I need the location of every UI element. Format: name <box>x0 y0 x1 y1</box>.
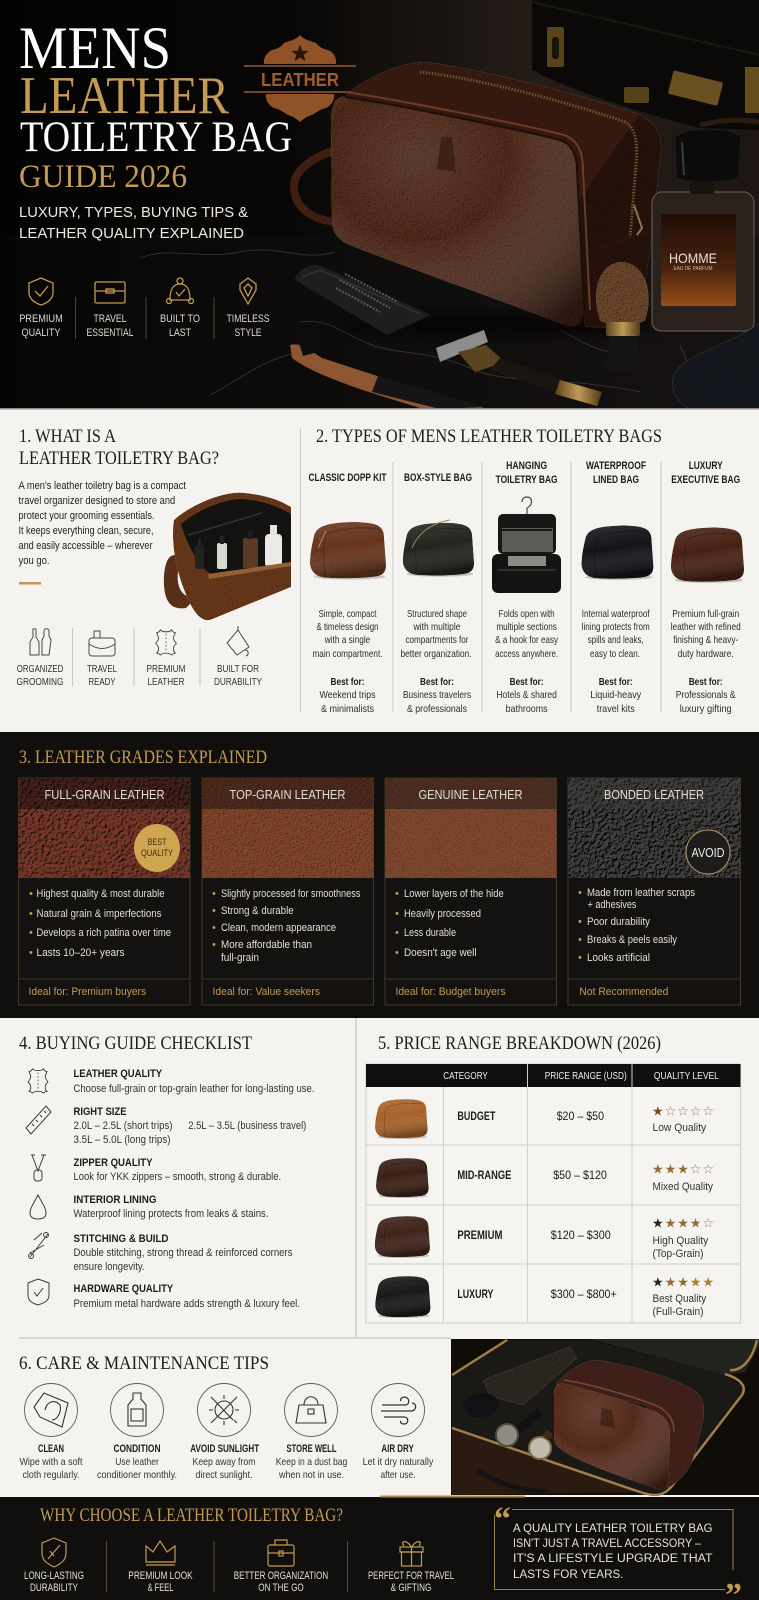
column headings: WATERPROOF <box>586 460 646 472</box>
feature labels: BUILT FOR <box>217 663 259 675</box>
column descriptions: compartments for <box>406 634 469 646</box>
column descriptions: Structured shape <box>407 608 467 620</box>
card: genuine: Doesn't age well <box>404 947 477 959</box>
checklist details: Premium metal hardware adds strength & luxury feel. <box>74 1298 300 1310</box>
quote box: ISN'T JUST A TRAVEL ACCESSORY – <box>513 1536 701 1550</box>
card: genuine: Lower layers of the hide <box>404 888 504 900</box>
badge: best quality <box>134 824 180 872</box>
checklist titles: LEATHER QUALITY <box>74 1068 163 1080</box>
panel: why choose <box>0 1496 759 1600</box>
heading: 5. PRICE RANGE BREAKDOWN (2026) <box>378 1033 661 1054</box>
icon: cloth <box>34 1393 68 1427</box>
card: full-grain: • <box>29 947 33 959</box>
icon: stitching <box>28 1232 48 1258</box>
column descriptions: duty hardware. <box>678 648 734 660</box>
best-for labels <box>330 676 723 688</box>
column descriptions: better organization. <box>400 648 472 660</box>
suitcase lid and interior <box>507 1339 759 1375</box>
column descriptions: travel kits <box>597 703 635 715</box>
card: genuine: • <box>395 927 399 939</box>
card: genuine: Ideal for: Budget buyers <box>396 986 506 998</box>
feature labels: ORGANIZED <box>17 663 64 675</box>
icon: organized grooming <box>30 629 51 655</box>
column descriptions: finishing & heavy- <box>673 634 739 646</box>
watches <box>496 1412 551 1459</box>
care titles: AVOID SUNLIGHT <box>190 1443 259 1455</box>
care details: direct sunlight. <box>196 1469 252 1481</box>
row thumbnails <box>375 1099 430 1318</box>
bag: classic dopp kit <box>310 522 386 580</box>
care titles: CLEAN <box>38 1443 64 1455</box>
why icons <box>42 1538 423 1567</box>
hero icon labels: QUALITY <box>22 327 61 339</box>
icon: dust bag handbag <box>296 1397 326 1423</box>
quote box <box>494 1501 742 1600</box>
checklist details: 3.5L – 5.0L (long trips) <box>74 1134 170 1146</box>
quality labels: Best Quality <box>652 1293 707 1305</box>
title: TOILETRY BAG <box>20 114 292 161</box>
card: full-grain: Develops a rich patina over time <box>36 927 171 939</box>
checklist icons <box>26 1069 51 1305</box>
column descriptions: & timeless design <box>316 621 379 633</box>
care titles <box>38 1443 414 1455</box>
row prices: $120 – $300 <box>551 1228 611 1242</box>
skincare tube <box>295 265 431 335</box>
checklist titles: RIGHT SIZE <box>74 1106 126 1118</box>
card: full-grain: Natural grain & imperfections <box>36 908 162 920</box>
checklist titles: INTERIOR LINING <box>74 1194 156 1206</box>
table <box>366 1064 740 1323</box>
perfume bottle <box>652 130 754 331</box>
feature labels <box>16 663 262 688</box>
hero bottom line <box>0 408 759 410</box>
hero leather bag <box>331 62 661 337</box>
bag: waterproof lined <box>582 525 653 580</box>
table header: CATEGORY <box>443 1071 488 1082</box>
hero icon labels: TIMELESS <box>226 313 270 325</box>
care details: when not in use. <box>278 1469 344 1481</box>
care details: conditioner monthly. <box>97 1469 177 1481</box>
best-for labels: Best for: <box>689 676 723 688</box>
checklist titles <box>74 1068 174 1295</box>
suitcase handle <box>478 1470 548 1492</box>
heading: LEATHER TOILETRY BAG? <box>19 448 219 469</box>
star ratings <box>652 1104 714 1290</box>
icon: crown <box>146 1541 175 1565</box>
feature labels: PREMIUM <box>146 663 186 675</box>
card: top-grain: full-grain <box>221 952 259 964</box>
card: top-grain: Slightly processed for smoothness <box>221 888 361 900</box>
icon: travel essential <box>95 282 125 303</box>
title: MENS <box>19 15 171 81</box>
bottles inside bag <box>195 525 282 569</box>
checklist titles: STITCHING & BUILD <box>74 1233 169 1245</box>
icon: shield <box>28 1279 49 1305</box>
care details: Wipe with a soft <box>20 1456 83 1468</box>
title <box>19 15 292 195</box>
icons: features <box>30 626 249 656</box>
column descriptions: spills and leaks, <box>588 634 644 646</box>
panel: what is a leather toiletry bag <box>16 426 291 688</box>
card: top-grain: • <box>212 939 216 951</box>
best-for labels: Best for: <box>330 676 364 688</box>
icon: leather badge: LEATHER <box>261 70 339 90</box>
card: genuine: • <box>395 888 399 900</box>
icon: briefcase <box>268 1540 294 1566</box>
quote box: IT'S A LIFESTYLE UPGRADE THAT <box>513 1551 713 1565</box>
bag: box-style <box>403 520 474 577</box>
photo: bag in suitcase <box>451 1339 759 1495</box>
checklist details: Look for YKK zippers – smooth, strong & durable. <box>74 1171 281 1183</box>
heading: 2. TYPES OF MENS LEATHER TOILETRY BAGS <box>316 426 662 447</box>
razor <box>436 330 602 406</box>
card: full-grain: • <box>29 927 33 939</box>
panel: buying guide <box>19 1018 451 1338</box>
gold dash <box>19 582 41 584</box>
care icons <box>24 1384 424 1436</box>
hero icon labels <box>19 313 270 339</box>
best-for labels: Best for: <box>510 676 544 688</box>
quote box: LASTS FOR YEARS. <box>513 1567 624 1581</box>
panel: price range <box>366 1033 740 1323</box>
checklist details: ensure longevity. <box>74 1261 144 1273</box>
badge: best quality: BEST <box>148 837 167 848</box>
card: full-grain: Highest quality & most durable <box>36 888 164 900</box>
quality labels: (Top-Grain) <box>652 1248 704 1260</box>
card: full-grain: FULL-GRAIN LEATHER <box>44 787 164 802</box>
card: top-grain: Ideal for: Value seekers <box>212 986 320 998</box>
card: genuine <box>385 778 556 1005</box>
quote box: “ <box>494 1501 511 1538</box>
icon: leather hide <box>28 1069 48 1093</box>
care details: Use leather <box>115 1456 159 1468</box>
checklist details: Waterproof lining protects from leaks & stains. <box>74 1208 268 1220</box>
heading: 1. WHAT IS A <box>19 426 116 447</box>
suitcase background <box>532 0 759 130</box>
hero icon labels: TRAVEL <box>94 313 126 325</box>
card: bonded: Not Recommended <box>579 986 668 998</box>
icon row: hero benefits <box>19 278 270 339</box>
column descriptions: Professionals & <box>676 689 736 701</box>
care titles: AIR DRY <box>381 1443 414 1455</box>
card: bonded: Looks artificial <box>587 952 650 964</box>
row categories <box>457 1111 512 1301</box>
card: genuine: • <box>395 947 399 959</box>
badge: best quality: QUALITY <box>141 848 174 859</box>
row categories: PREMIUM <box>457 1230 502 1242</box>
column descriptions: Simple, compact <box>318 608 377 620</box>
bag: luxury executive <box>671 528 744 583</box>
table header: QUALITY LEVEL <box>654 1071 719 1082</box>
icon: no sunlight <box>209 1395 239 1425</box>
column headings <box>308 460 740 486</box>
column descriptions <box>312 608 741 715</box>
quality labels: Low Quality <box>652 1122 707 1134</box>
shaving brush <box>596 262 649 372</box>
heading: WHY CHOOSE A LEATHER TOILETRY BAG? <box>40 1505 343 1526</box>
icon: gift <box>400 1542 423 1566</box>
quality labels: (Full-Grain) <box>652 1306 704 1318</box>
quality labels: High Quality <box>652 1235 709 1247</box>
bag handle <box>294 150 342 222</box>
card: genuine: • <box>395 908 399 920</box>
description text: travel organizer designed to store and <box>18 495 175 507</box>
care details: cloth regularly. <box>22 1469 80 1481</box>
table header: PRICE RANGE (USD) <box>545 1071 627 1082</box>
column descriptions: multiple sections <box>496 621 557 633</box>
row prices: $50 – $120 <box>553 1168 607 1182</box>
badge: avoid: AVOID <box>692 845 724 860</box>
description text: A men's leather toiletry bag is a compact <box>18 480 186 492</box>
card: top-grain: • <box>212 922 216 934</box>
column descriptions: & a hook for easy <box>495 634 559 646</box>
checklist details <box>74 1083 314 1310</box>
card: top-grain <box>202 778 374 1005</box>
column descriptions: easy to clean. <box>590 648 640 660</box>
row prices: $20 – $50 <box>557 1109 604 1123</box>
column descriptions: with a single <box>324 634 370 646</box>
best-for labels: Best for: <box>599 676 633 688</box>
table header <box>443 1071 719 1082</box>
description text: It keeps everything clean, secure, <box>18 525 154 537</box>
card: bonded: BONDED LEATHER <box>604 787 704 802</box>
card: bonded: Made from leather scraps <box>587 887 695 899</box>
icon: ruler <box>26 1106 51 1134</box>
star ratings: ★★★★★ <box>652 1276 714 1290</box>
hero icon labels: LAST <box>169 327 191 339</box>
perfume bottle: HOMME <box>669 250 717 266</box>
row categories: BUDGET <box>457 1111 495 1123</box>
care titles: CONDITION <box>114 1443 161 1455</box>
checklist titles: HARDWARE QUALITY <box>74 1283 174 1295</box>
why labels: PERFECT FOR TRAVEL <box>368 1570 454 1582</box>
column descriptions: Hotels & shared <box>496 689 557 701</box>
quality labels <box>652 1122 713 1318</box>
why labels: PREMIUM LOOK <box>128 1570 193 1582</box>
care details: Keep away from <box>192 1456 256 1468</box>
card: genuine: GENUINE LEATHER <box>418 787 522 802</box>
row prices <box>551 1109 617 1301</box>
dividers <box>76 297 214 339</box>
icon: leather badge <box>244 35 356 122</box>
icon: zipper <box>31 1155 46 1181</box>
card: top-grain: • <box>212 888 216 900</box>
card: full-grain: • <box>29 888 33 900</box>
description text <box>18 480 186 567</box>
card: top-grain: Strong & durable <box>221 905 294 917</box>
card: bonded: • <box>578 952 582 964</box>
column descriptions: Business travelers <box>403 689 471 701</box>
feature labels: DURABILITY <box>214 676 262 688</box>
column descriptions: Internal waterproof <box>582 608 650 620</box>
panel: hero <box>0 0 759 410</box>
panel: care tips <box>19 1353 434 1481</box>
icon: water drop <box>30 1195 46 1219</box>
card: bonded: Breaks & peels easily <box>587 934 677 946</box>
title: LEATHER <box>20 67 230 125</box>
icon: conditioner bottle <box>128 1393 146 1426</box>
checklist details: 2.5L – 3.5L (business travel) <box>188 1120 306 1132</box>
best-for labels: Best for: <box>420 676 454 688</box>
why labels: BETTER ORGANIZATION <box>234 1570 328 1582</box>
card: full-grain: Ideal for: Premium buyers <box>28 986 147 998</box>
column descriptions: Weekend trips <box>320 689 376 701</box>
bag: hanging toiletry <box>492 497 561 593</box>
icon: travel ready <box>89 631 115 656</box>
star ratings: ★★★☆☆ <box>652 1162 714 1178</box>
heading <box>19 426 219 469</box>
icon: premium quality <box>29 278 53 305</box>
hero icon labels: STYLE <box>234 327 262 339</box>
hero icon labels: BUILT TO <box>160 313 200 325</box>
column headings: LUXURY <box>689 460 723 472</box>
column headings: LINED BAG <box>593 474 639 486</box>
description text: and easily accessible – wherever <box>18 540 153 552</box>
card: full-grain: • <box>29 908 33 920</box>
feature labels: GROOMING <box>16 676 64 688</box>
card: bonded: • <box>578 934 582 946</box>
feature labels: LEATHER <box>148 676 185 688</box>
column descriptions: access anywhere. <box>495 648 558 660</box>
card: top-grain: TOP-GRAIN LEATHER <box>230 787 346 802</box>
card: bonded: Poor durability <box>587 916 650 928</box>
towel <box>672 323 759 409</box>
title: GUIDE 2026 <box>19 159 187 195</box>
why labels: DURABILITY <box>30 1582 78 1594</box>
black pouches <box>483 1347 577 1405</box>
marble veins <box>140 250 691 395</box>
card: genuine: Less durable <box>404 927 456 939</box>
column descriptions: main compartment. <box>312 648 382 660</box>
card: bonded: + adhesives <box>588 899 637 911</box>
icon: premium leather <box>156 630 176 655</box>
row categories: MID-RANGE <box>457 1170 512 1182</box>
feature labels: TRAVEL <box>87 663 117 675</box>
description text: protect your grooming essentials. <box>18 510 154 522</box>
badge: avoid <box>686 830 730 874</box>
why labels: & GIFTING <box>391 1582 431 1594</box>
why labels: LONG-LASTING <box>24 1570 84 1582</box>
column headings: CLASSIC DOPP KIT <box>308 472 387 484</box>
hero icon labels: PREMIUM <box>19 313 63 325</box>
column descriptions: leather with refined <box>671 621 741 633</box>
open bag photo <box>164 493 291 620</box>
card: bonded: • <box>578 887 582 899</box>
card: full-grain: Lasts 10–20+ years <box>36 947 125 959</box>
description text: you go. <box>18 555 50 567</box>
icon: built for durability <box>227 626 249 656</box>
panel: types of bags <box>300 426 744 715</box>
why labels <box>24 1570 454 1594</box>
column descriptions: Premium full-grain <box>672 608 739 620</box>
column descriptions: with multiple <box>413 621 461 633</box>
card: full-grain <box>18 778 190 1005</box>
care details: after use. <box>380 1469 416 1481</box>
why labels: ON THE GO <box>258 1582 304 1594</box>
card: bonded <box>568 778 740 1005</box>
hero icon labels: ESSENTIAL <box>86 327 134 339</box>
feature labels: READY <box>88 676 116 688</box>
heading: 6. CARE & MAINTENANCE TIPS <box>19 1353 269 1374</box>
care details <box>20 1456 434 1481</box>
icon: shield <box>42 1538 66 1567</box>
column descriptions: & professionals <box>407 703 467 715</box>
checklist details: 2.0L – 2.5L (short trips) <box>74 1120 172 1132</box>
card: top-grain: More affordable than <box>221 939 312 951</box>
star ratings: ★☆☆☆☆ <box>652 1104 714 1120</box>
row prices: $300 – $800+ <box>551 1287 617 1301</box>
star ratings: ★★★★☆ <box>652 1216 714 1232</box>
card: top-grain: • <box>212 905 216 917</box>
subtitle <box>19 205 248 242</box>
icon: timeless style <box>240 278 256 304</box>
column descriptions: Liquid-heavy <box>590 689 642 701</box>
column descriptions: lining protects from <box>582 621 650 633</box>
card: genuine: Heavily processed <box>404 908 481 920</box>
quote box: A QUALITY LEATHER TOILETRY BAG <box>513 1521 712 1535</box>
heading: 4. BUYING GUIDE CHECKLIST <box>19 1033 252 1054</box>
care titles: STORE WELL <box>286 1443 337 1455</box>
column descriptions: & minimalists <box>321 703 374 715</box>
column descriptions: Folds open with <box>499 608 555 620</box>
column headings: EXECUTIVE BAG <box>671 474 740 486</box>
card: bonded: • <box>578 916 582 928</box>
icon: built to last <box>166 278 194 304</box>
perfume bottle: EAU DE PARFUM <box>674 266 713 272</box>
subtitle: LUXURY, TYPES, BUYING TIPS & <box>19 205 248 221</box>
subtitle: LEATHER QUALITY EXPLAINED <box>19 226 244 242</box>
leather bag in suitcase <box>554 1360 704 1489</box>
column descriptions: luxury gifting <box>680 703 732 715</box>
column headings: BOX-STYLE BAG <box>404 472 472 484</box>
card: top-grain: Clean, modern appearance <box>221 922 336 934</box>
column headings: TOILETRY BAG <box>496 474 558 486</box>
icon: air wind <box>381 1397 416 1424</box>
column headings: HANGING <box>506 460 547 472</box>
checklist titles: ZIPPER QUALITY <box>74 1157 153 1169</box>
checklist details: Double stitching, strong thread & reinforced corners <box>74 1247 293 1259</box>
row categories: LUXURY <box>457 1289 494 1301</box>
quality labels: Mixed Quality <box>652 1181 713 1193</box>
heading: 3. LEATHER GRADES EXPLAINED <box>19 747 267 768</box>
care details: Keep in a dust bag <box>276 1456 347 1468</box>
care details: Let it dry naturally <box>363 1456 434 1468</box>
panel: leather grades <box>0 732 759 1018</box>
column descriptions: bathrooms <box>506 703 548 715</box>
checklist details: Choose full-grain or top-grain leather for long-lasting use. <box>74 1083 314 1095</box>
why labels: & FEEL <box>148 1582 174 1594</box>
toothbrush <box>290 326 484 409</box>
